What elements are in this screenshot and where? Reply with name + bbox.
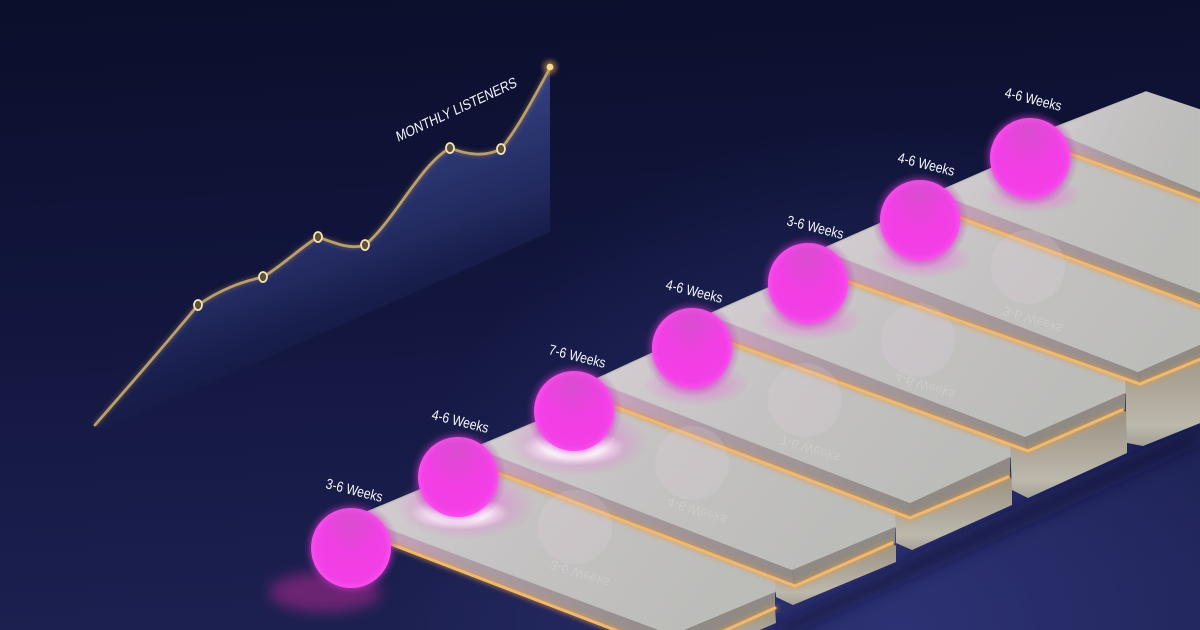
platform 2 [474, 400, 896, 605]
platform 1 side [355, 517, 675, 630]
platform 5 top [820, 206, 1200, 372]
chart: monthly listeners [95, 60, 557, 432]
platform 2 body [775, 543, 896, 605]
sphere 1 [303, 500, 399, 596]
platform 1 top [355, 466, 775, 630]
chart end point [543, 60, 557, 74]
platform 2 side [474, 448, 795, 586]
label 5: 3-6 Weeks [785, 213, 845, 243]
platform 3 end lip [910, 457, 1010, 518]
platform 6 top [935, 148, 1200, 293]
label 1: 3-6 Weeks [324, 476, 384, 506]
platform 4 side [707, 315, 1028, 451]
platform 4 [707, 271, 1127, 498]
platform 6 [935, 148, 1200, 307]
platform 2 end lip [792, 527, 895, 586]
platform 6 light strip [955, 216, 1200, 307]
platform 1 end lip [672, 592, 775, 630]
label 7: 4-6 Weeks [1003, 85, 1063, 115]
platform 1 [355, 466, 776, 630]
floor shadow under platforms [776, 426, 1200, 630]
reflections on platforms: 3-6 Weeks [548, 557, 612, 591]
chart area fill [95, 68, 550, 432]
platform 6 side [935, 193, 1200, 307]
platform 5 light strip [843, 280, 1200, 384]
reflections on platforms: 4-6 Weeks [665, 494, 729, 528]
platform 3 body [895, 477, 1012, 550]
sphere 5 [760, 235, 856, 331]
platform 3 [592, 335, 1012, 550]
sphere 6 [872, 172, 968, 268]
duration labels [324, 85, 1063, 506]
label 6: 4-6 Weeks [896, 150, 956, 180]
chart label: MONTHLY LISTENERS [394, 75, 519, 146]
glow pools under spheres [269, 177, 1081, 612]
platform 1 body [660, 608, 776, 630]
platform 1 light strip [375, 538, 775, 630]
platform 3 top [592, 335, 1010, 503]
sphere 4 [644, 300, 740, 396]
platform 2 light strip [490, 470, 892, 586]
label 2: 4-6 Weeks [430, 407, 490, 437]
reflections on platforms [538, 230, 1065, 591]
chart line [95, 68, 550, 425]
label 3: 7-6 Weeks [547, 342, 607, 372]
platform 7 [1048, 92, 1200, 201]
platform 2 top [474, 400, 895, 570]
platform 4 top [707, 271, 1125, 437]
platform 4 body [1010, 410, 1127, 498]
platform 7 light strip [1068, 153, 1200, 201]
sphere 2 [410, 429, 506, 525]
label 4: 4-6 Weeks [664, 277, 724, 307]
chart line glow [95, 68, 550, 425]
chart markers [194, 143, 505, 310]
platform 5 body [1125, 343, 1200, 446]
sphere 7 [982, 110, 1078, 206]
sphere 3 [526, 363, 622, 459]
reflections on platforms: 7-6 Weeks [778, 432, 842, 466]
platform 3 light strip [608, 404, 1008, 518]
platform 7 top [1048, 92, 1200, 192]
platform 5 side [820, 250, 1140, 384]
platform 4 end lip [1025, 393, 1125, 451]
reflections on platforms: 3-6 Weeks [1001, 303, 1065, 337]
reflections on platforms: 4-6 Weeks [893, 369, 957, 403]
platform 5 [820, 206, 1200, 446]
platform 5 end lip [1138, 328, 1200, 384]
platform 7 side [1048, 130, 1200, 200]
platform 4 light strip [728, 342, 1122, 451]
platform 3 side [592, 381, 910, 518]
